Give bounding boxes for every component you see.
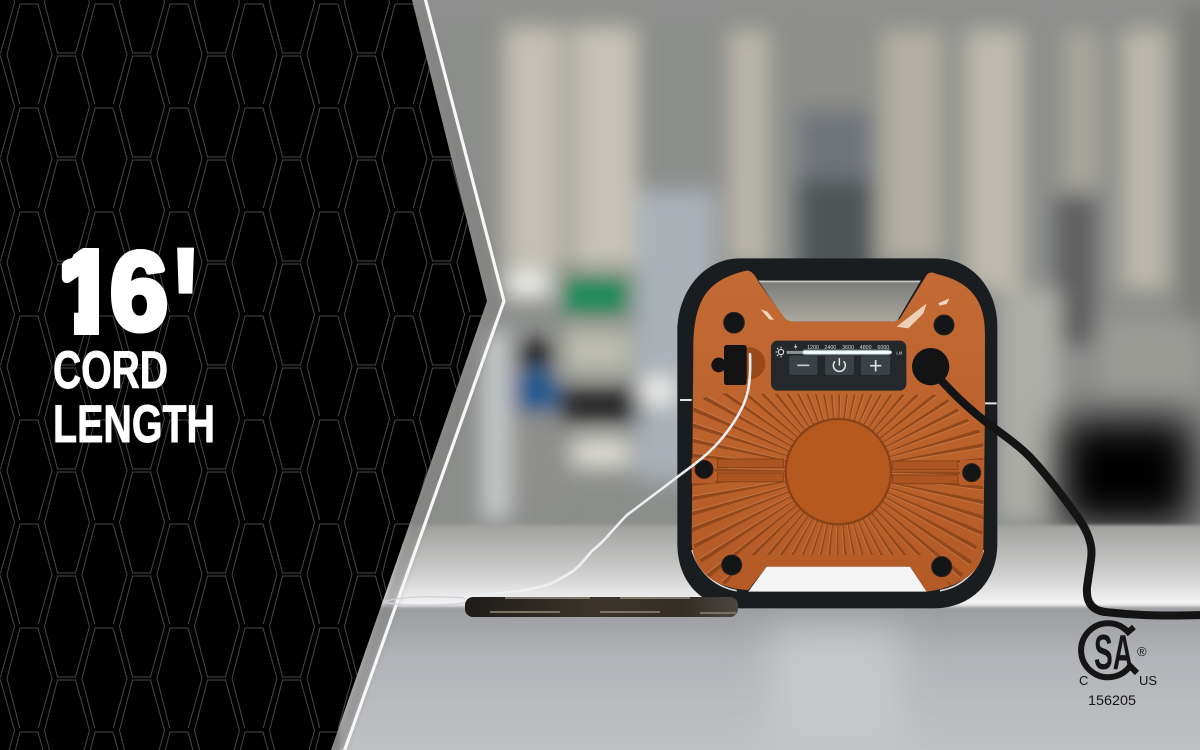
white USB cable — [465, 354, 750, 597]
centre disc — [786, 419, 891, 524]
minus button — [789, 356, 817, 375]
translucent chevron band — [331, 0, 505, 750]
CSA certification mark — [1079, 623, 1157, 709]
control panel — [771, 341, 906, 391]
sunburst fins — [692, 394, 984, 586]
letters SA: SA — [1094, 626, 1133, 680]
sun icon — [776, 347, 784, 357]
white chevron line — [344, 0, 504, 750]
big number 16: 1 — [60, 230, 116, 354]
bottom window — [748, 567, 927, 592]
big number 16 — [62, 248, 168, 335]
certificate number: 156205 — [1088, 693, 1136, 709]
C label: C — [1079, 673, 1088, 688]
brightness bar — [787, 348, 892, 357]
phone on table — [465, 597, 738, 617]
lumen scale: 3600 — [842, 345, 854, 351]
hinge gaps — [680, 400, 997, 403]
plus button — [861, 356, 890, 375]
black power cord — [928, 365, 1200, 616]
label CORD: CORD — [53, 341, 168, 400]
thin wires behind chevron — [383, 597, 467, 605]
big number 16: 6 — [110, 230, 168, 354]
CSA ring — [1081, 623, 1137, 677]
screws — [695, 312, 981, 577]
orange housing — [692, 271, 985, 592]
headline: 16' cord length — [54, 248, 213, 443]
lumen scale: 4800 — [860, 345, 872, 351]
foot mark: ' — [171, 210, 200, 411]
registered mark: ® — [1137, 644, 1147, 659]
USB recess — [733, 347, 765, 379]
left screw boss — [692, 458, 715, 483]
US label: US — [1139, 673, 1157, 688]
work light — [677, 258, 997, 608]
handle window — [758, 281, 921, 322]
corner gaps — [692, 550, 983, 591]
power button — [825, 356, 854, 375]
side slots — [717, 459, 958, 484]
lumen scale: 6000 — [877, 345, 889, 351]
black hexagon panel — [0, 0, 487, 750]
label LENGTH: LENGTH — [53, 395, 215, 454]
power cord grommet — [912, 348, 949, 385]
USB port cap — [711, 345, 747, 385]
right screw boss — [960, 460, 983, 485]
lightning mark — [794, 343, 797, 350]
lumen scale — [807, 345, 903, 356]
gloss highlights — [761, 298, 949, 328]
lumen scale: 1200 — [807, 345, 819, 351]
lumen scale: LM — [896, 351, 903, 356]
rubber frame — [677, 258, 997, 608]
lumen scale: 2400 — [824, 345, 836, 351]
